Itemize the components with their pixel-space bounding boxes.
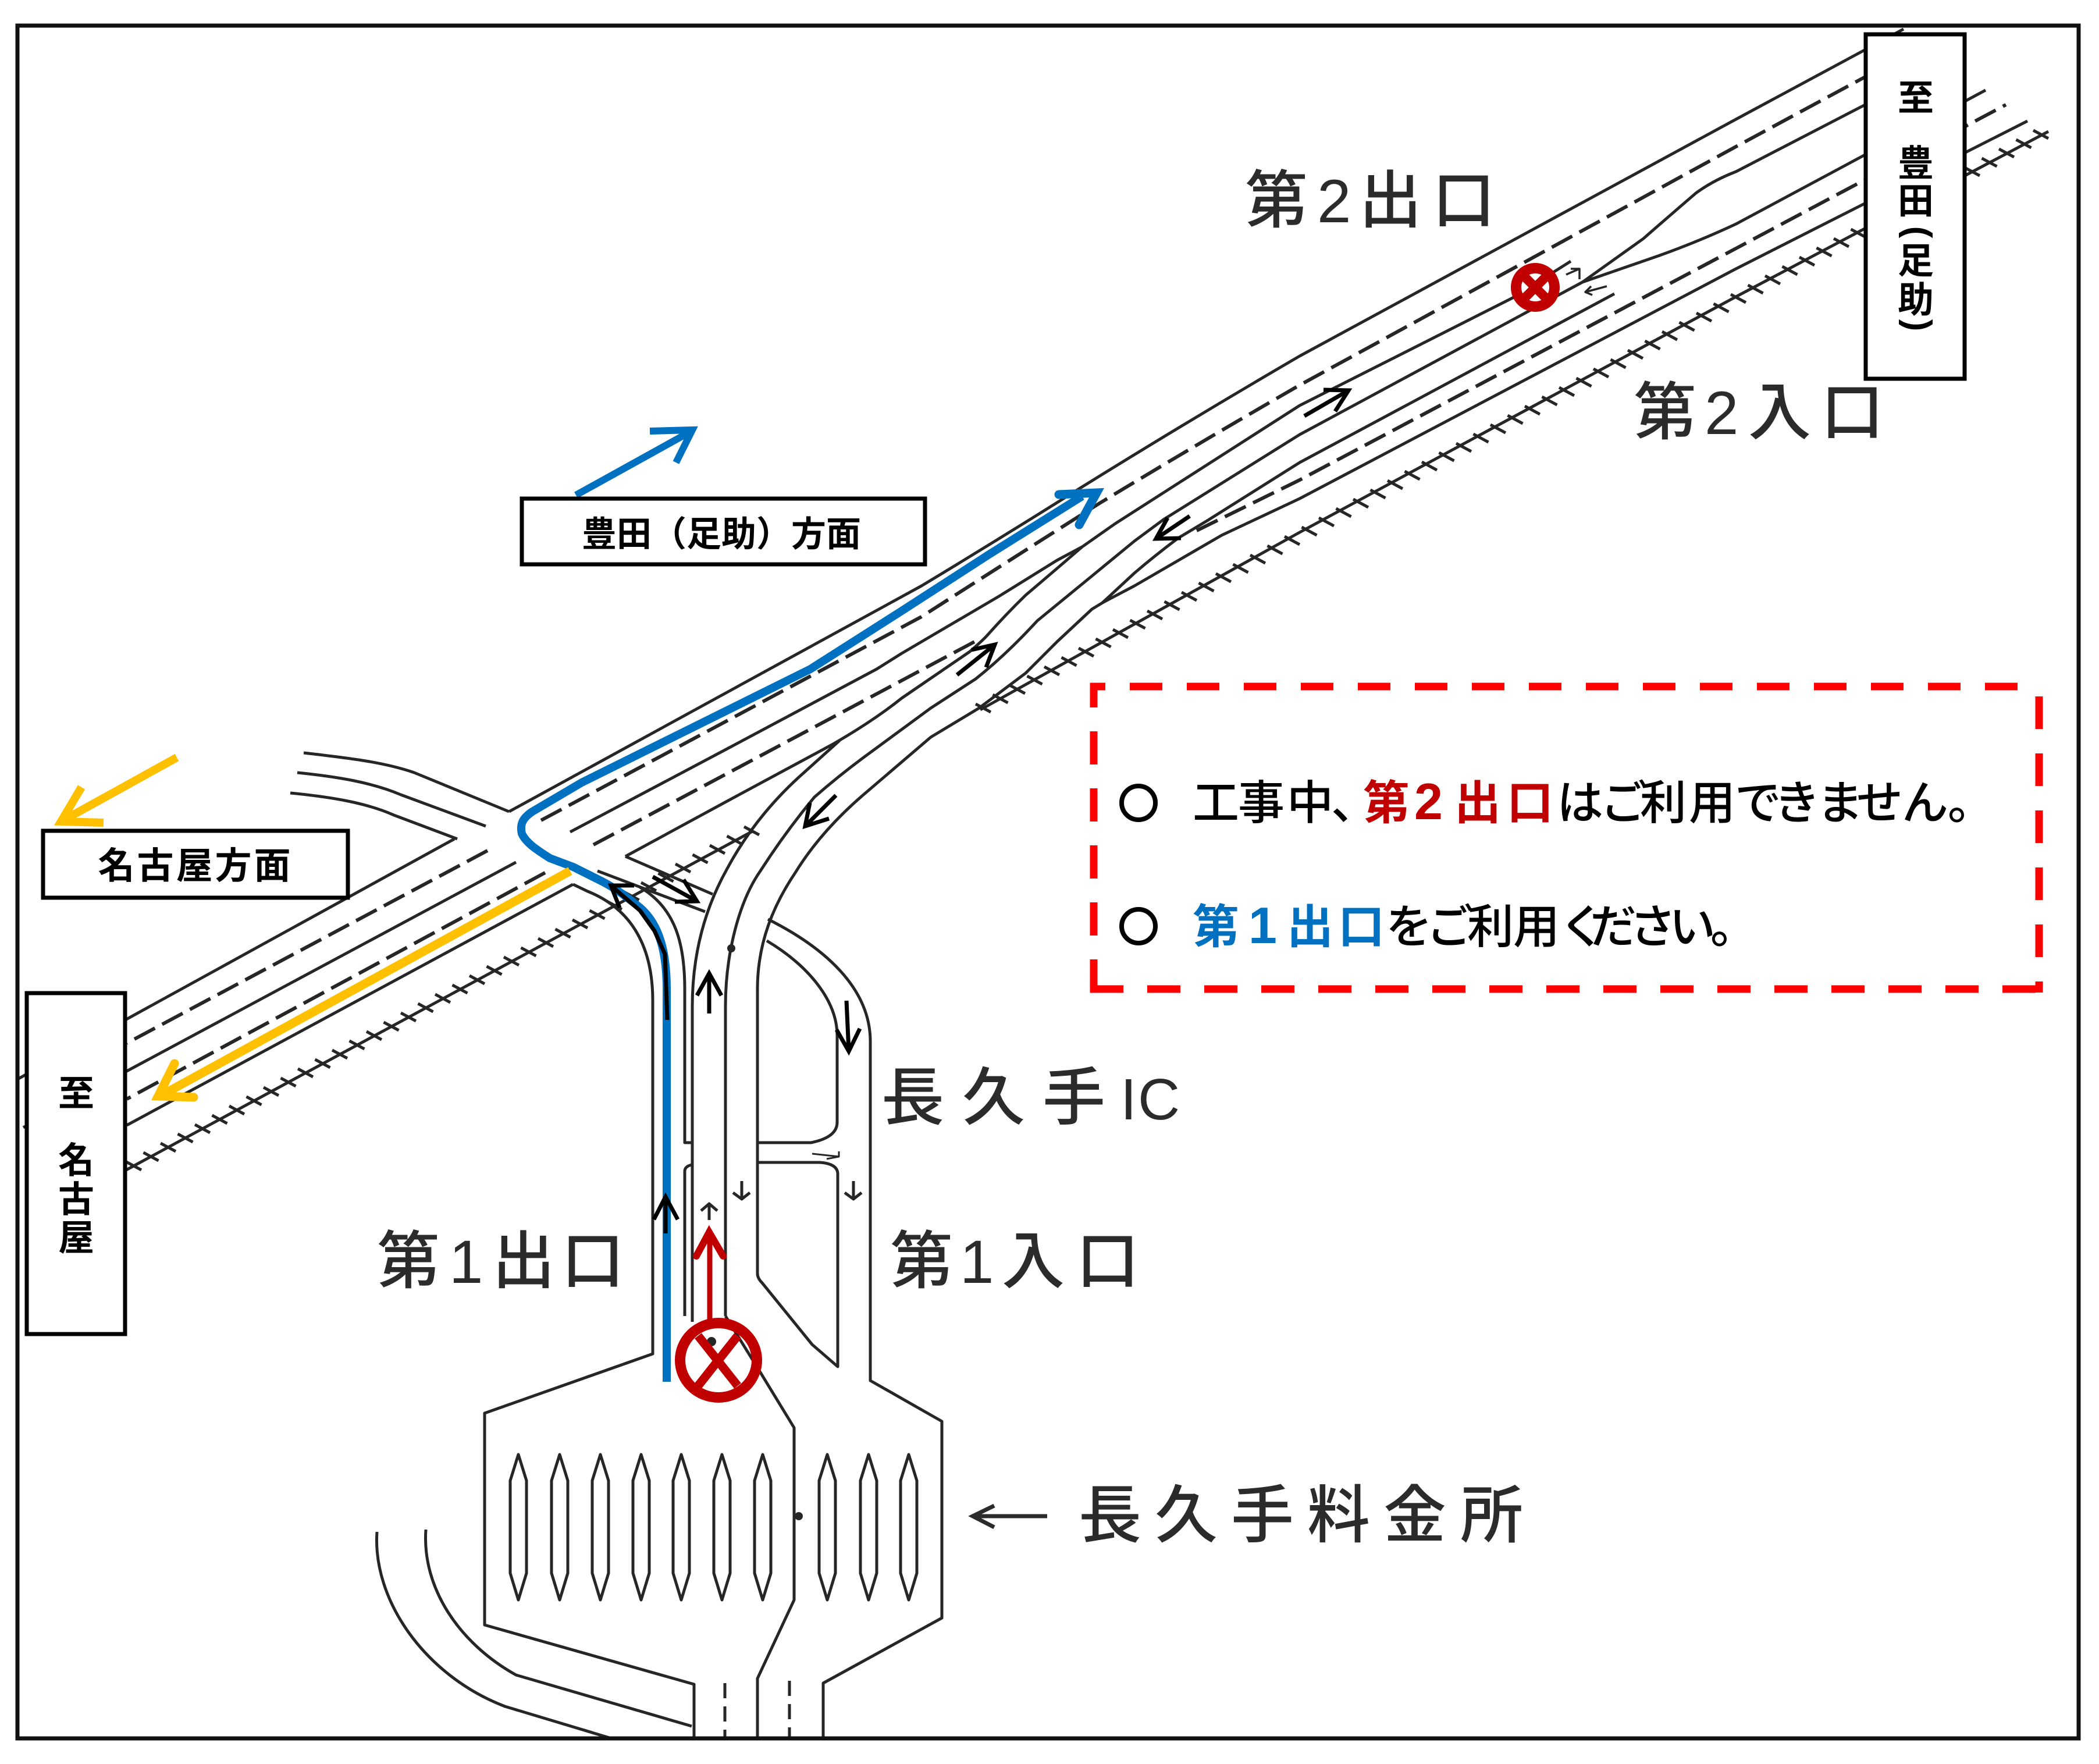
label: 第2出口: 2: [1317, 168, 1351, 236]
railway: [125, 125, 2058, 1171]
box: 名古屋方面: 名古屋方面: [98, 837, 293, 890]
box: 豊田(足助)方面: [522, 499, 925, 564]
notice line 1: 工事中、: [1193, 766, 1378, 833]
box: 至 豊田(足助): 田: [1898, 172, 1934, 224]
arrow: Toyota direction: [576, 430, 692, 495]
box: 至 名古屋: 屋: [58, 1208, 94, 1261]
arrow: toll booth pointer: [973, 1506, 1047, 1527]
box: 至 名古屋: 名: [58, 1131, 94, 1183]
notice line 2: 第: [1193, 890, 1239, 957]
notice line 2: をご利用ください。: [1386, 890, 1757, 957]
label: 第1入口: 1: [960, 1228, 994, 1296]
notice line 1: 出口: [1454, 766, 1553, 833]
label: 長久手IC: 長久手: [881, 1047, 1105, 1138]
arrow: Nagoya direction: [61, 757, 177, 823]
box: 名古屋方面: [43, 831, 348, 898]
notice line 1: はご利用できません。: [1557, 766, 1994, 833]
label: 第1出口: 出口: [492, 1211, 624, 1301]
notice dashed border: [1090, 683, 2039, 993]
yellow route to Nagoya: [160, 871, 570, 1096]
blue route to Toyota: [521, 496, 1082, 1382]
label: 第2入口: 第: [1634, 362, 1696, 453]
box: 至 豊田(足助): 足: [1898, 232, 1934, 284]
expressway toward Toyota: [509, 29, 2027, 856]
box: 至 豊田(足助): (: [1898, 226, 1938, 239]
notice line 2: 1: [1248, 897, 1277, 954]
label: 第1入口: 第: [890, 1211, 953, 1301]
red route arrow: [696, 1230, 723, 1324]
notice line 1: 2: [1414, 773, 1443, 830]
box: 至 豊田(足助): [1866, 34, 1965, 379]
label: 第2入口: 入口: [1748, 362, 1884, 453]
yellow route arrow head: [158, 1064, 194, 1097]
box: 至 名古屋: 古: [58, 1170, 94, 1222]
closed marker: toll plaza: [680, 1323, 757, 1397]
bullet 2: [1122, 909, 1155, 943]
printed small arrows: [701, 269, 1607, 1220]
notice line 1: 第: [1363, 766, 1410, 833]
black route arrows: [611, 390, 1349, 1233]
label: 第1入口: 入口: [1002, 1211, 1139, 1301]
box: 豊田(足助)方面: 豊田（足助）方面: [582, 506, 861, 557]
toll booth islands: [510, 1454, 917, 1600]
expressway toward Nagoya: [17, 839, 573, 1128]
label: 第2入口: 2: [1705, 379, 1738, 447]
label: 第1出口: 1: [449, 1228, 483, 1296]
bullet 1: [1122, 786, 1155, 820]
closed marker: second exit: [1516, 268, 1554, 307]
label: 第1出口: 第: [377, 1211, 440, 1301]
box: 至 豊田(足助): 至: [1898, 69, 1934, 121]
box: 至 豊田(足助): 豊: [1898, 134, 1934, 186]
interchange ramps: [377, 282, 1582, 1738]
box: 至 名古屋: [27, 993, 125, 1334]
box: 至 豊田(足助): ): [1898, 319, 1938, 331]
label: 長久手IC: IC: [1120, 1067, 1180, 1132]
label: 第2出口: 出口: [1359, 150, 1495, 241]
box: 至 名古屋: 至: [58, 1064, 94, 1116]
notice line 2: 出口: [1287, 890, 1385, 957]
blue route arrow head: [1059, 493, 1097, 525]
notice box: [1090, 683, 2039, 993]
label: 長久手料金所: 長久手料金所: [1079, 1465, 1523, 1556]
road dots: [707, 944, 803, 1520]
box: 至 豊田(足助): 助: [1898, 271, 1934, 323]
label: 第2出口: 第: [1245, 150, 1308, 241]
crossing road: [290, 753, 713, 912]
